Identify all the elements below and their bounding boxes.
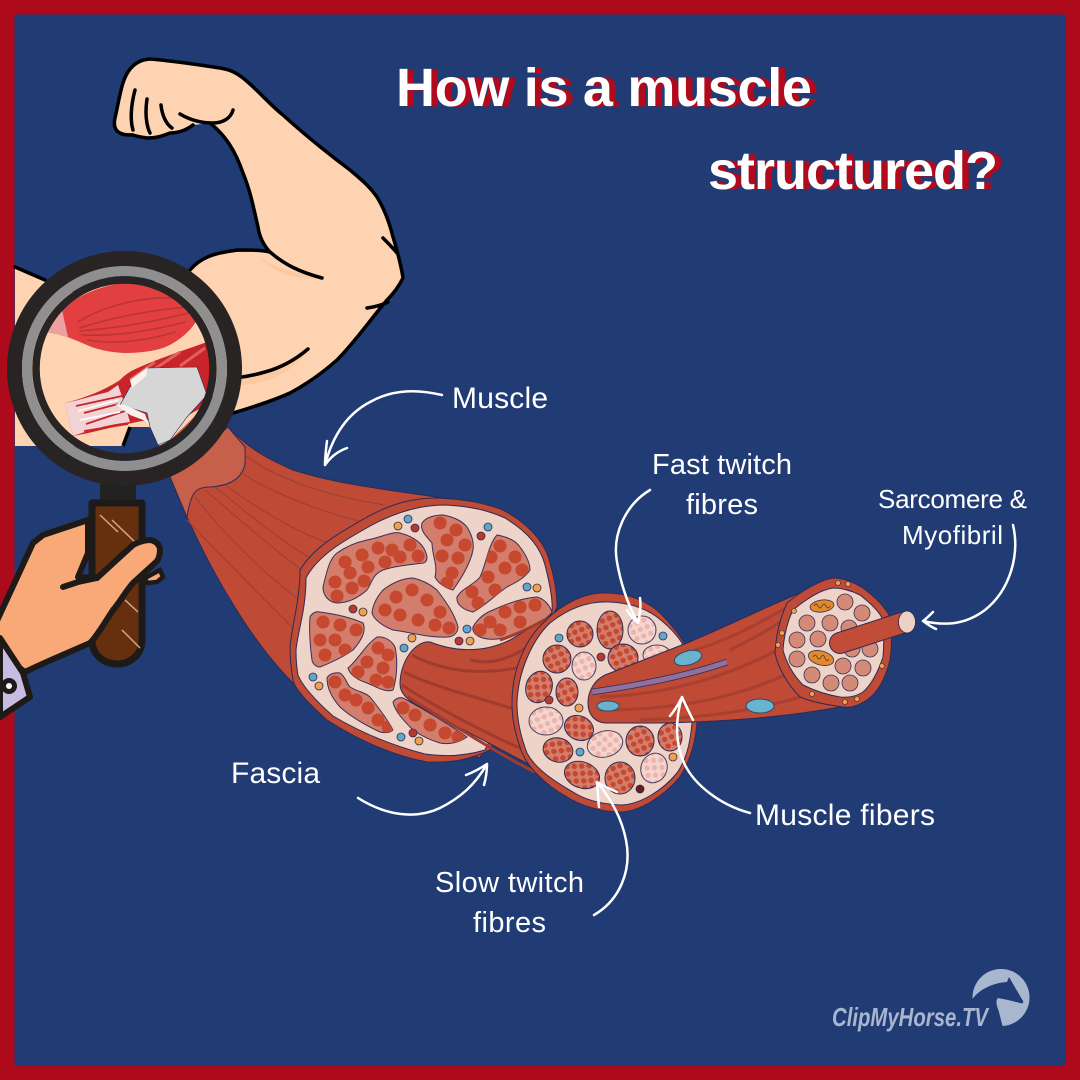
- arrow to fascia: [358, 764, 487, 815]
- fascicle bundle tube and section: [400, 593, 697, 812]
- fascicles: [310, 515, 552, 744]
- tendon tab: [170, 427, 245, 517]
- arrow to muscle fibers: [670, 697, 750, 813]
- label: Slow twitch fibres: Slow twitch: [435, 867, 584, 899]
- label: Fast twitch fibres: [652, 449, 792, 521]
- blood vessel: [592, 662, 727, 692]
- fascia white edges: [115, 367, 150, 428]
- nuclei: [597, 648, 774, 713]
- flexed arm illustration: [15, 59, 403, 446]
- fibre striations: [600, 600, 800, 720]
- lens grey ring: [27, 271, 222, 466]
- lens triceps: [65, 342, 215, 436]
- arm shape: [100, 59, 403, 413]
- fascicle cells: [320, 523, 535, 737]
- muscle fibre tube and section: [588, 578, 916, 723]
- logo: ClipMyHorse.TV: [832, 969, 1030, 1032]
- bundle section interior: [517, 602, 692, 805]
- fascia tissue: [120, 367, 207, 445]
- title line two: structured?: [708, 141, 997, 201]
- fibre tube: [588, 578, 850, 723]
- biceps striations: [78, 298, 192, 342]
- label: Slow twitch fibres: [435, 867, 584, 939]
- cuff button: [1, 678, 17, 694]
- myofibril circles: [789, 594, 878, 691]
- whole muscle with fascia: [170, 427, 557, 762]
- lens inner dark ring: [36, 280, 213, 457]
- label: Muscle: Muscle: [452, 382, 548, 415]
- handle connector: [100, 470, 136, 502]
- torso patch: [15, 267, 135, 446]
- vessels: [309, 515, 541, 745]
- lens navy corner: [90, 427, 160, 454]
- hand holding magnifier: [0, 520, 163, 717]
- finger crease: [63, 578, 97, 587]
- magnifying glass: [14, 258, 234, 664]
- muscle cross-section interior: [296, 505, 552, 756]
- lens skin background: [80, 284, 199, 446]
- bundle striations: [402, 618, 548, 772]
- muscle striations: [187, 455, 385, 630]
- arrow to slow twitch fibres: [594, 782, 628, 915]
- rim vessels: [776, 580, 884, 704]
- dark slow twitch fibres: [521, 611, 682, 794]
- bundle tube: [400, 593, 620, 812]
- label: Muscle fibers: Muscle fibers: [755, 799, 935, 832]
- arrow to muscle: [325, 391, 442, 465]
- bundle vessels: [545, 632, 677, 793]
- label: Sarcomere and Myofibril: Sarcomere &: [878, 484, 1027, 514]
- lens contents: [48, 284, 210, 448]
- title line one: How is a muscle: [396, 58, 812, 118]
- logo badge circle: [972, 969, 1030, 1026]
- lens biceps: [47, 283, 197, 353]
- label: Fast twitch fibres: Fast twitch: [652, 449, 792, 481]
- label: Slow twitch fibres: fibres: [473, 907, 546, 939]
- bundle section rim: [512, 593, 697, 812]
- pale fast twitch fibres: [529, 616, 671, 787]
- navy outline stroke: [123, 427, 130, 446]
- tendon fibres: [65, 385, 130, 436]
- mitochondria: [807, 598, 835, 668]
- fibre section interior: [783, 588, 884, 697]
- skin shading: [240, 256, 322, 385]
- biceps tendon fade: [47, 310, 68, 337]
- myofibril rod: [840, 611, 916, 643]
- little finger tip: [145, 570, 163, 583]
- triceps highlights: [130, 348, 205, 380]
- label: Fascia: Fascia: [231, 757, 320, 790]
- logo wordmark: ClipMyHorse.TV: [832, 1002, 990, 1032]
- fibre section rim: [775, 578, 892, 707]
- hand palm: [0, 520, 160, 672]
- muscle belly: [170, 427, 557, 758]
- label: Sarcomere and Myofibril: Myofibril: [902, 520, 1003, 550]
- muscle stub: [170, 418, 194, 440]
- muscle cross-section rim: [290, 498, 557, 762]
- label: Sarcomere and Myofibril: [878, 484, 1027, 550]
- handle grip: [92, 503, 142, 664]
- arm outline: [15, 59, 403, 446]
- logo horse head cutout: [971, 977, 1023, 1028]
- lens outer dark ring: [14, 258, 234, 478]
- arrow to sarcomere: [923, 525, 1015, 629]
- shirt cuff: [0, 638, 30, 717]
- handle shine: [100, 515, 140, 648]
- arrow to fast twitch fibres: [616, 490, 650, 623]
- label: Fast twitch fibres: fibres: [686, 489, 758, 521]
